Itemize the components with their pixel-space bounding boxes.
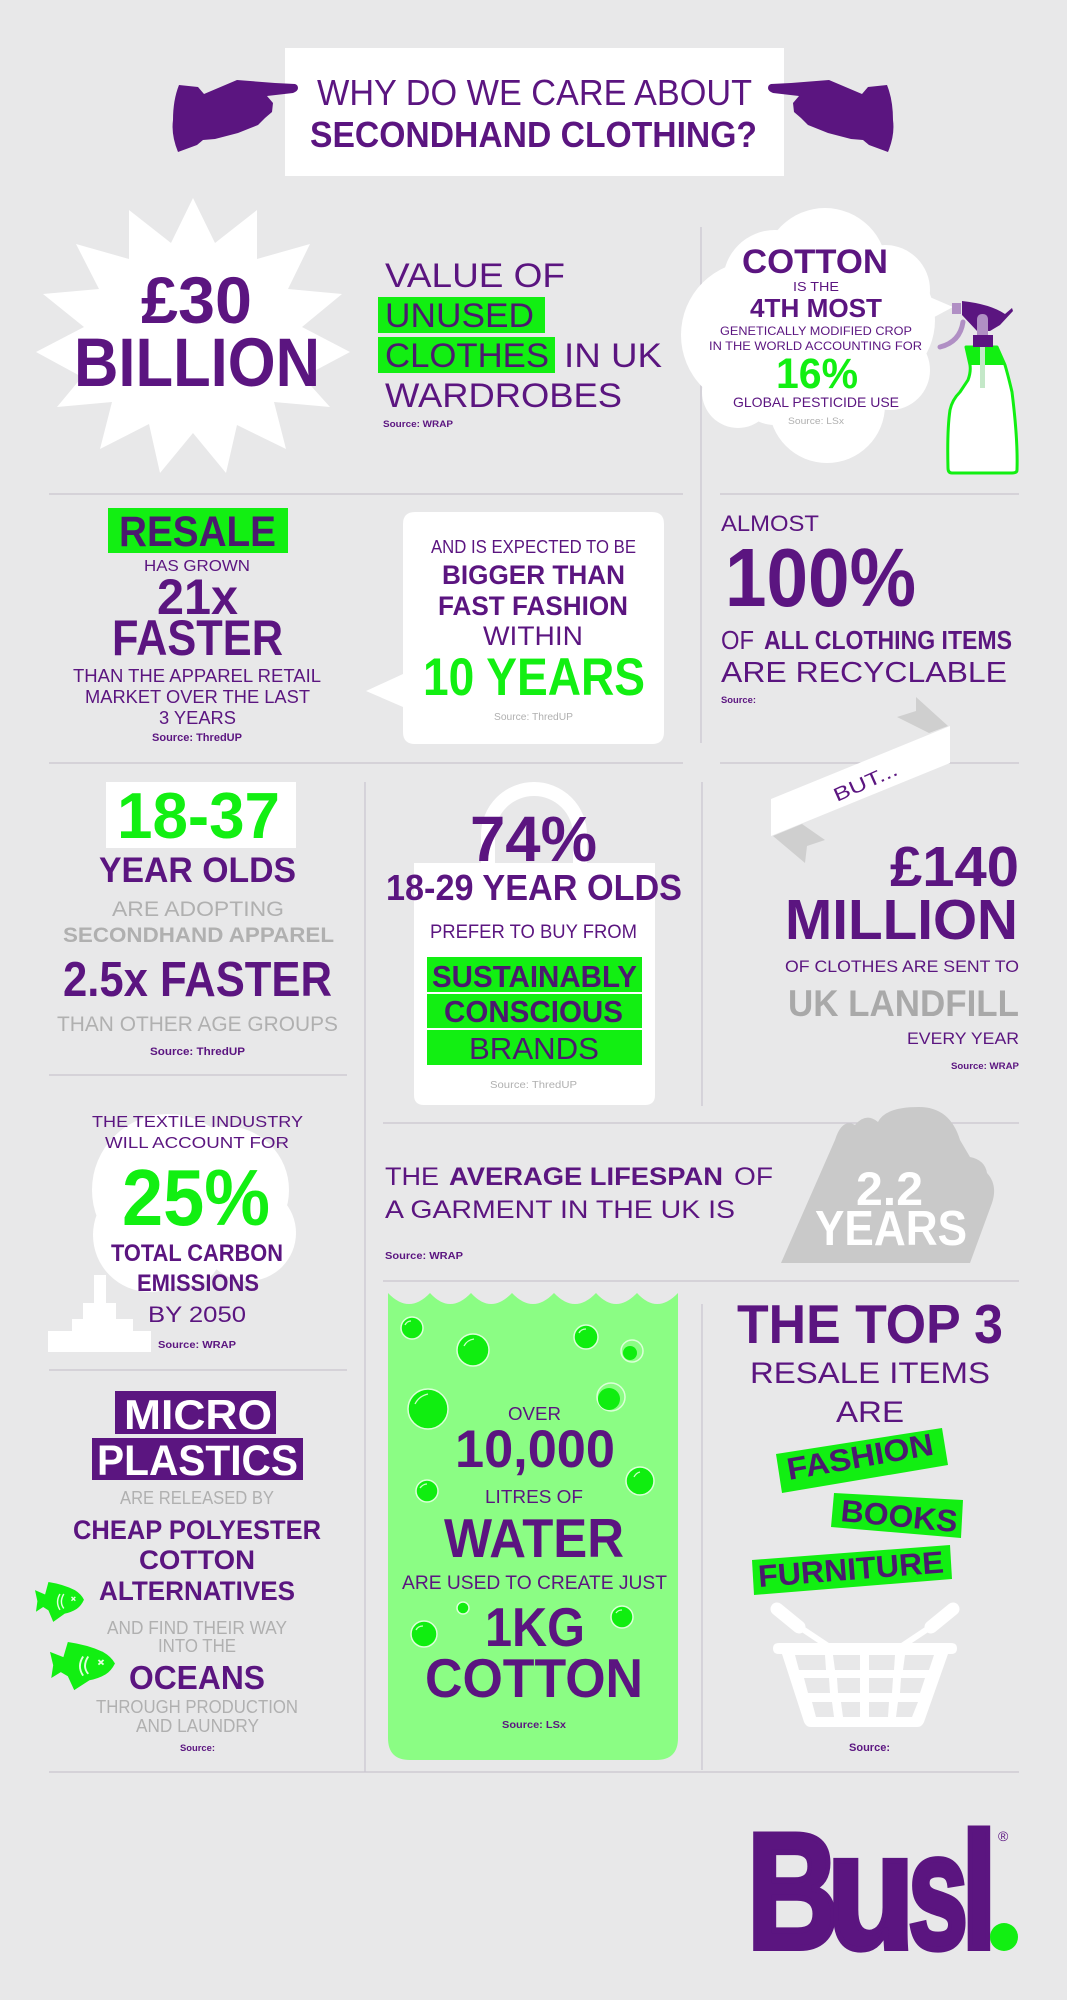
bag handle [488, 789, 580, 870]
panel: shopping bag 74 percent: SUSTAINABLY [432, 959, 637, 994]
panel: landfill: EVERY YEAR [907, 1029, 1019, 1048]
panel: micro plastics: MICRO [124, 1391, 272, 1438]
panel: carbon emissions: THE TEXTILE INDUSTRY [92, 1114, 303, 1131]
panel: unused clothes text: UNUSED [385, 297, 534, 335]
panel: cotton cloud and spray bottle: 4TH MOST [750, 293, 882, 323]
panel: water [388, 1293, 678, 1760]
panel: garment lifespan: A GARMENT IN THE UK IS [385, 1196, 735, 1224]
highlight: resale [108, 508, 288, 553]
panel: top 3 resale items: RESALE ITEMS [750, 1357, 990, 1390]
panel: micro plastics: COTTON [139, 1545, 255, 1575]
panel: cotton cloud and spray bottle: GLOBAL PESTICIDE USE [733, 394, 899, 410]
panel: shopping bag 74 percent: CONSCIOUS [444, 994, 623, 1029]
panel: micro plastics [35, 1391, 321, 1753]
panel: unused clothes text: VALUE OF [385, 257, 565, 295]
starburst [36, 198, 350, 473]
panel: speech bubble: 10 YEARS [423, 648, 645, 707]
panel: recyclable: ALMOST [721, 511, 819, 536]
tag: books: BOOKS [839, 1493, 959, 1539]
panel: micro plastics: Source: [180, 1743, 215, 1753]
panel: water: 1KG [485, 1596, 585, 1658]
title line one: WHY DO WE CARE ABOUT [317, 72, 752, 113]
panel: cotton cloud and spray bottle: COTTON [742, 243, 888, 281]
panel: water: Source: LSx [502, 1720, 566, 1731]
panel: carbon emissions: Source: WRAP [158, 1340, 236, 1351]
panel: speech bubble [366, 512, 664, 744]
panel: unused clothes text [378, 257, 662, 429]
figure: £30 [141, 263, 252, 337]
panel: micro plastics: PLASTICS [97, 1437, 298, 1485]
panel: resale growth: 21x [157, 569, 238, 625]
panel: but ribbon [771, 697, 950, 863]
panel: water: OVER [508, 1404, 561, 1424]
icon: left pointing hand [173, 80, 298, 152]
cloud [681, 208, 953, 463]
panel: shopping bag 74 percent: BRANDS [469, 1031, 599, 1066]
tag: furniture: FURNITURE [757, 1544, 945, 1594]
panel: micro plastics: ALTERNATIVES [99, 1576, 295, 1606]
panel: garment lifespan: 2.2 [856, 1162, 923, 1215]
panel: landfill [785, 835, 1019, 1071]
panel: unused clothes text: IN UK [564, 337, 662, 375]
logo dot [990, 1923, 1018, 1951]
panel: top 3 resale items: THE TOP 3 [737, 1293, 1003, 1355]
panel: 18-37 year olds: 18-37 [117, 779, 280, 852]
panel: 18-37 year olds: THAN OTHER AGE GROUPS [57, 1013, 338, 1036]
registered mark: ® [998, 1828, 1009, 1844]
icon: shopping basket [773, 1609, 957, 1727]
bag body [414, 863, 655, 1105]
title line two: SECONDHAND CLOTHING? [310, 114, 757, 155]
panel: resale growth: RESALE [119, 508, 276, 556]
panel: cotton cloud and spray bottle: 16% [776, 350, 858, 398]
panel: cotton cloud and spray bottle: IN THE WORLD ACCOUNTING FOR [709, 339, 922, 353]
panel: cotton cloud and spray bottle: GENETICALLY MODIFIED CROP [720, 324, 912, 338]
panel: top 3 resale items [737, 1293, 1003, 1754]
panel: speech bubble: AND IS EXPECTED TO BE [431, 537, 636, 557]
panel: speech bubble: Source: ThredUP [494, 712, 573, 723]
panel: 18-37 year olds [57, 779, 338, 1058]
panel: garment lifespan: OF [734, 1163, 773, 1191]
panel: 18-37 year olds: SECONDHAND APPAREL [63, 924, 334, 947]
panel: 30 billion [36, 198, 350, 473]
panel: water: ARE USED TO CREATE JUST [402, 1573, 667, 1594]
highlight: micro [115, 1391, 276, 1434]
smoke cloud [92, 1114, 296, 1292]
panel: carbon emissions: BY 2050 [148, 1302, 246, 1327]
highlight: clothes [378, 337, 555, 373]
panel: micro plastics: INTO THE [158, 1636, 236, 1656]
logo: Busl: l [961, 1799, 997, 1983]
panel: micro plastics: AND FIND THEIR WAY [107, 1618, 287, 1638]
panel: water: LITRES OF [485, 1487, 583, 1507]
panel: shopping bag 74 percent: Source: ThredUP [490, 1080, 577, 1091]
panel: landfill: OF CLOTHES ARE SENT TO [785, 957, 1019, 976]
panel: recyclable: OF [721, 625, 754, 655]
panel: garment lifespan [385, 1107, 994, 1263]
highlight bars [427, 957, 642, 1065]
panel: speech bubble: WITHIN [483, 621, 583, 651]
logo: Busl: u [827, 1799, 915, 1983]
age box [106, 782, 296, 848]
panel: resale growth: THAN THE APPAREL RETAIL [73, 666, 321, 686]
bubble [366, 512, 664, 744]
panel: unused clothes text: WARDROBES [385, 377, 622, 415]
panel: top 3 resale items: Source: [849, 1742, 890, 1754]
panel: resale growth: 3 YEARS [159, 708, 236, 728]
highlight: unused [378, 297, 545, 333]
panel: recyclable [721, 511, 1012, 705]
panel: cotton cloud and spray bottle: Source: LSx [788, 416, 845, 426]
panel: unused clothes text: Source: WRAP [383, 419, 453, 429]
panel: micro plastics: AND LAUNDRY [136, 1716, 259, 1736]
panel: resale growth [73, 508, 321, 744]
logo: Busl [747, 1799, 1018, 1983]
panel: resale growth: FASTER [112, 610, 283, 666]
panel: micro plastics: THROUGH PRODUCTION [96, 1697, 298, 1717]
bubbles [401, 1317, 654, 1647]
panel: shopping bag 74 percent: 18-29 YEAR OLDS [386, 867, 682, 908]
panel: landfill: UK LANDFILL [788, 983, 1019, 1024]
panel: cotton cloud and spray bottle: IS THE [793, 279, 839, 294]
panel: landfill: MILLION [785, 888, 1018, 952]
panel: unused clothes text: CLOTHES [385, 337, 549, 375]
panel: 18-37 year olds: Source: ThredUP [150, 1046, 245, 1058]
panel: carbon emissions: 25% [122, 1153, 270, 1242]
panel: garment lifespan: THE [385, 1163, 439, 1191]
water body [388, 1293, 678, 1760]
panel: water: COTTON [425, 1647, 643, 1709]
panel: shopping bag 74 percent [386, 789, 682, 1105]
highlight: plastics [92, 1438, 303, 1480]
panel: shopping bag 74 percent: 74% [470, 803, 597, 875]
panel: garment lifespan: Source: WRAP [385, 1251, 463, 1262]
panel: recyclable: ARE RECYCLABLE [721, 657, 1007, 689]
tag: fashion: FASHION [784, 1427, 936, 1487]
ribbon [771, 726, 950, 836]
panel: but ribbon: BUT... [830, 760, 901, 807]
panel: carbon emissions: EMISSIONS [137, 1270, 259, 1297]
panel: garment lifespan: AVERAGE LIFESPAN [449, 1163, 723, 1191]
panel: water: WATER [444, 1507, 624, 1569]
panel: 18-37 year olds: 2.5x FASTER [63, 953, 332, 1007]
icon: fish large [50, 1642, 115, 1690]
panel: landfill: £140 [890, 835, 1019, 899]
panel: recyclable: ALL CLOTHING ITEMS [764, 625, 1012, 655]
panel: shopping bag 74 percent: PREFER TO BUY FROM [430, 922, 637, 943]
panel: 18-37 year olds: YEAR OLDS [99, 851, 296, 890]
panel: carbon emissions: WILL ACCOUNT FOR [105, 1135, 289, 1152]
panel: carbon emissions [48, 1114, 303, 1352]
panel: landfill: Source: WRAP [951, 1061, 1019, 1071]
panel: resale growth: Source: ThredUP [152, 732, 242, 744]
panel: speech bubble: BIGGER THAN [442, 560, 625, 590]
logo: Busl: B [747, 1799, 839, 1983]
logo: Busl: s [908, 1799, 968, 1983]
icon: fish small [35, 1582, 84, 1622]
panel: micro plastics: OCEANS [129, 1659, 265, 1696]
icon: factory chimney [48, 1275, 151, 1352]
panel: garment lifespan: YEARS [815, 1202, 967, 1256]
panel: recyclable: Source: [721, 695, 756, 705]
panel: top 3 resale items: ARE [836, 1396, 904, 1429]
title banner [173, 48, 893, 176]
panel: 30 billion: BILLION [74, 324, 320, 401]
icon: spray bottle [940, 301, 1017, 473]
panel: micro plastics: CHEAP POLYESTER [73, 1515, 321, 1545]
panel: 18-37 year olds: ARE ADOPTING [112, 898, 284, 921]
panel: resale growth: MARKET OVER THE LAST [85, 687, 310, 707]
panel: speech bubble: FAST FASHION [438, 591, 628, 621]
panel: recyclable: 100% [725, 531, 916, 624]
panel: micro plastics: ARE RELEASED BY [120, 1488, 274, 1508]
panel: cotton cloud and spray bottle [681, 208, 1017, 473]
icon: grey landfill heap [781, 1107, 994, 1263]
panel: water: 10,000 [455, 1420, 615, 1479]
panel: resale growth: HAS GROWN [144, 558, 250, 575]
icon: right pointing hand [768, 80, 893, 152]
panel: carbon emissions: TOTAL CARBON [111, 1240, 283, 1267]
